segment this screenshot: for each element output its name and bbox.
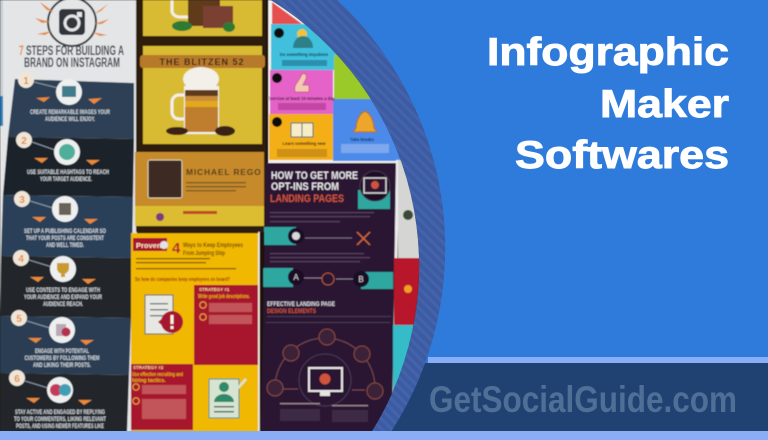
icon: monitor — [358, 171, 390, 209]
step 3: SET UP A PUBLISHING CALENDAR SO — [24, 229, 106, 235]
heading: HOW TO GET MORE — [271, 170, 358, 182]
icon: arm — [295, 73, 309, 92]
Proven badge — [133, 238, 167, 251]
step 4: YOUR AUDIENCE AND EXPAND YOUR — [24, 295, 102, 301]
step 6: POSTS, AND USING NEWER FEATURES LIKE — [16, 424, 104, 430]
step 1: AUDIENCE WILL ENJOY. — [45, 117, 95, 123]
red blocks — [194, 285, 258, 365]
heading: 4 — [172, 240, 181, 257]
panel: 4 ways to keep employees: From Jumping Ship — [183, 250, 225, 257]
panel: opt-ins landing pages: OPT-INS FROM — [271, 181, 339, 193]
panel: healthy habits — [267, 0, 418, 164]
subheading: EFFECTIVE LANDING PAGE — [267, 301, 336, 308]
title: Softwares — [515, 134, 729, 177]
mug: Blitzen 52 — [166, 67, 235, 136]
step 1: CREATE REMARKABLE IMAGES YOUR — [30, 110, 110, 116]
panel: opt-ins landing pages — [261, 160, 399, 432]
step 6: 6 — [14, 374, 20, 385]
bottom strip — [0, 431, 768, 440]
step 4: AUDIENCE REACH. — [43, 302, 83, 308]
panel: 4 ways to keep employees — [131, 232, 260, 432]
icon: open book — [291, 123, 313, 137]
icon: bell — [353, 111, 377, 132]
step 5: ENGAGE WITH POTENTIAL — [35, 349, 89, 355]
striped circular ring — [0, 0, 445, 431]
heading: 7 STEPS FOR BUILDING A — [19, 43, 124, 58]
banner: light strip — [428, 357, 768, 364]
title: Maker — [600, 83, 729, 126]
panel: 4 ways to keep employees: STRATEGY #2 — [133, 365, 164, 370]
panel: healthy habits: Take breaks — [350, 137, 375, 142]
icon: profile checkmark — [209, 379, 246, 418]
montage of infographics — [0, 0, 430, 432]
icon: hub monitor — [309, 368, 342, 396]
number badges — [272, 28, 284, 127]
panel: 4 ways to keep employees: Ways to Keep Employees — [183, 242, 243, 249]
hub diagram — [275, 338, 375, 406]
panel: 4 ways to keep employees: STRATEGY #1 — [199, 287, 230, 292]
title: Infographic — [487, 31, 729, 74]
panel: opt-ins landing pages: DESIGN ELEMENTS — [267, 308, 317, 315]
panel: opt-ins landing pages: LANDING PAGES — [270, 193, 344, 205]
panel: 4 ways to keep employees: Use effective recruiting and — [132, 372, 183, 378]
step 4: USE CONTESTS TO ENGAGE WITH — [26, 288, 100, 294]
chocolate mug — [172, 0, 235, 32]
step 6: TO YOUR COMMENTERS, LIKING RELEVANT — [14, 417, 106, 423]
A/B comparison: B — [358, 275, 364, 284]
icon: document alert — [145, 295, 183, 334]
panel: coffee recipes: THE BLITZEN 52 — [159, 57, 245, 67]
brown bio band — [135, 152, 264, 206]
step 5: 5 — [16, 314, 22, 325]
panel: coffee recipes — [135, 0, 266, 232]
step 5: AND LIKING THEIR POSTS. — [33, 363, 91, 369]
panel: Instagram steps: BRAND ON INSTAGRAM — [24, 55, 120, 70]
step 2: 2 — [21, 136, 27, 147]
photo — [148, 160, 182, 198]
step 4 — [13, 250, 102, 308]
icon: orange sparks — [35, 2, 109, 36]
step 3: 3 — [19, 195, 25, 206]
banner: dark band — [380, 363, 768, 431]
step 1: 1 — [23, 76, 29, 87]
step 5 — [11, 310, 100, 369]
panel: healthy habits: Do something impulsive — [280, 52, 329, 57]
panel: 4 ways to keep employees: So how do companies keep employees on board? — [135, 277, 230, 283]
step 3: AND WELL TIMED. — [46, 243, 84, 249]
panel: 4 ways to keep employees: Proven. — [136, 241, 164, 250]
step 2: USE SUITABLE HASHTAGS TO REACH — [27, 170, 109, 176]
panel: healthy habits: Learn something new — [282, 141, 326, 146]
panel: 4 ways to keep employees: Write good job descriptions. — [198, 294, 250, 300]
teal bar and X — [264, 227, 370, 245]
step 1 — [18, 72, 110, 123]
name: MICHAEL REGO — [186, 167, 262, 177]
step 3: THAT YOUR POSTS ARE CONSISTENT — [26, 236, 104, 242]
footer yellow band — [135, 206, 264, 226]
step 6 — [9, 370, 106, 430]
icon: Instagram logo — [48, 0, 96, 46]
panel: 4 ways to keep employees: hiring tactics. — [132, 378, 166, 384]
step 6: STAY ACTIVE AND ENGAGED BY REPLYING — [15, 410, 105, 416]
A/B comparison: A — [293, 273, 299, 282]
step 5: CUSTOMERS BY FOLLOWING THEM — [24, 356, 100, 362]
step 3 — [14, 191, 106, 249]
panel: rightmost sliver — [393, 160, 428, 432]
step 2 — [16, 132, 109, 183]
icon: landscape sun — [293, 29, 313, 48]
captions — [280, 403, 320, 404]
panel: Instagram steps — [0, 0, 137, 432]
ribbon: The Blitzen 52 — [140, 55, 265, 68]
step 4: 4 — [18, 254, 24, 265]
A/B comparison — [263, 268, 393, 289]
title — [487, 31, 729, 177]
panel: healthy habits: Exercise at least 10 minutes a day — [267, 96, 336, 101]
step 2: YOUR TARGET AUDIENCE. — [40, 177, 92, 183]
